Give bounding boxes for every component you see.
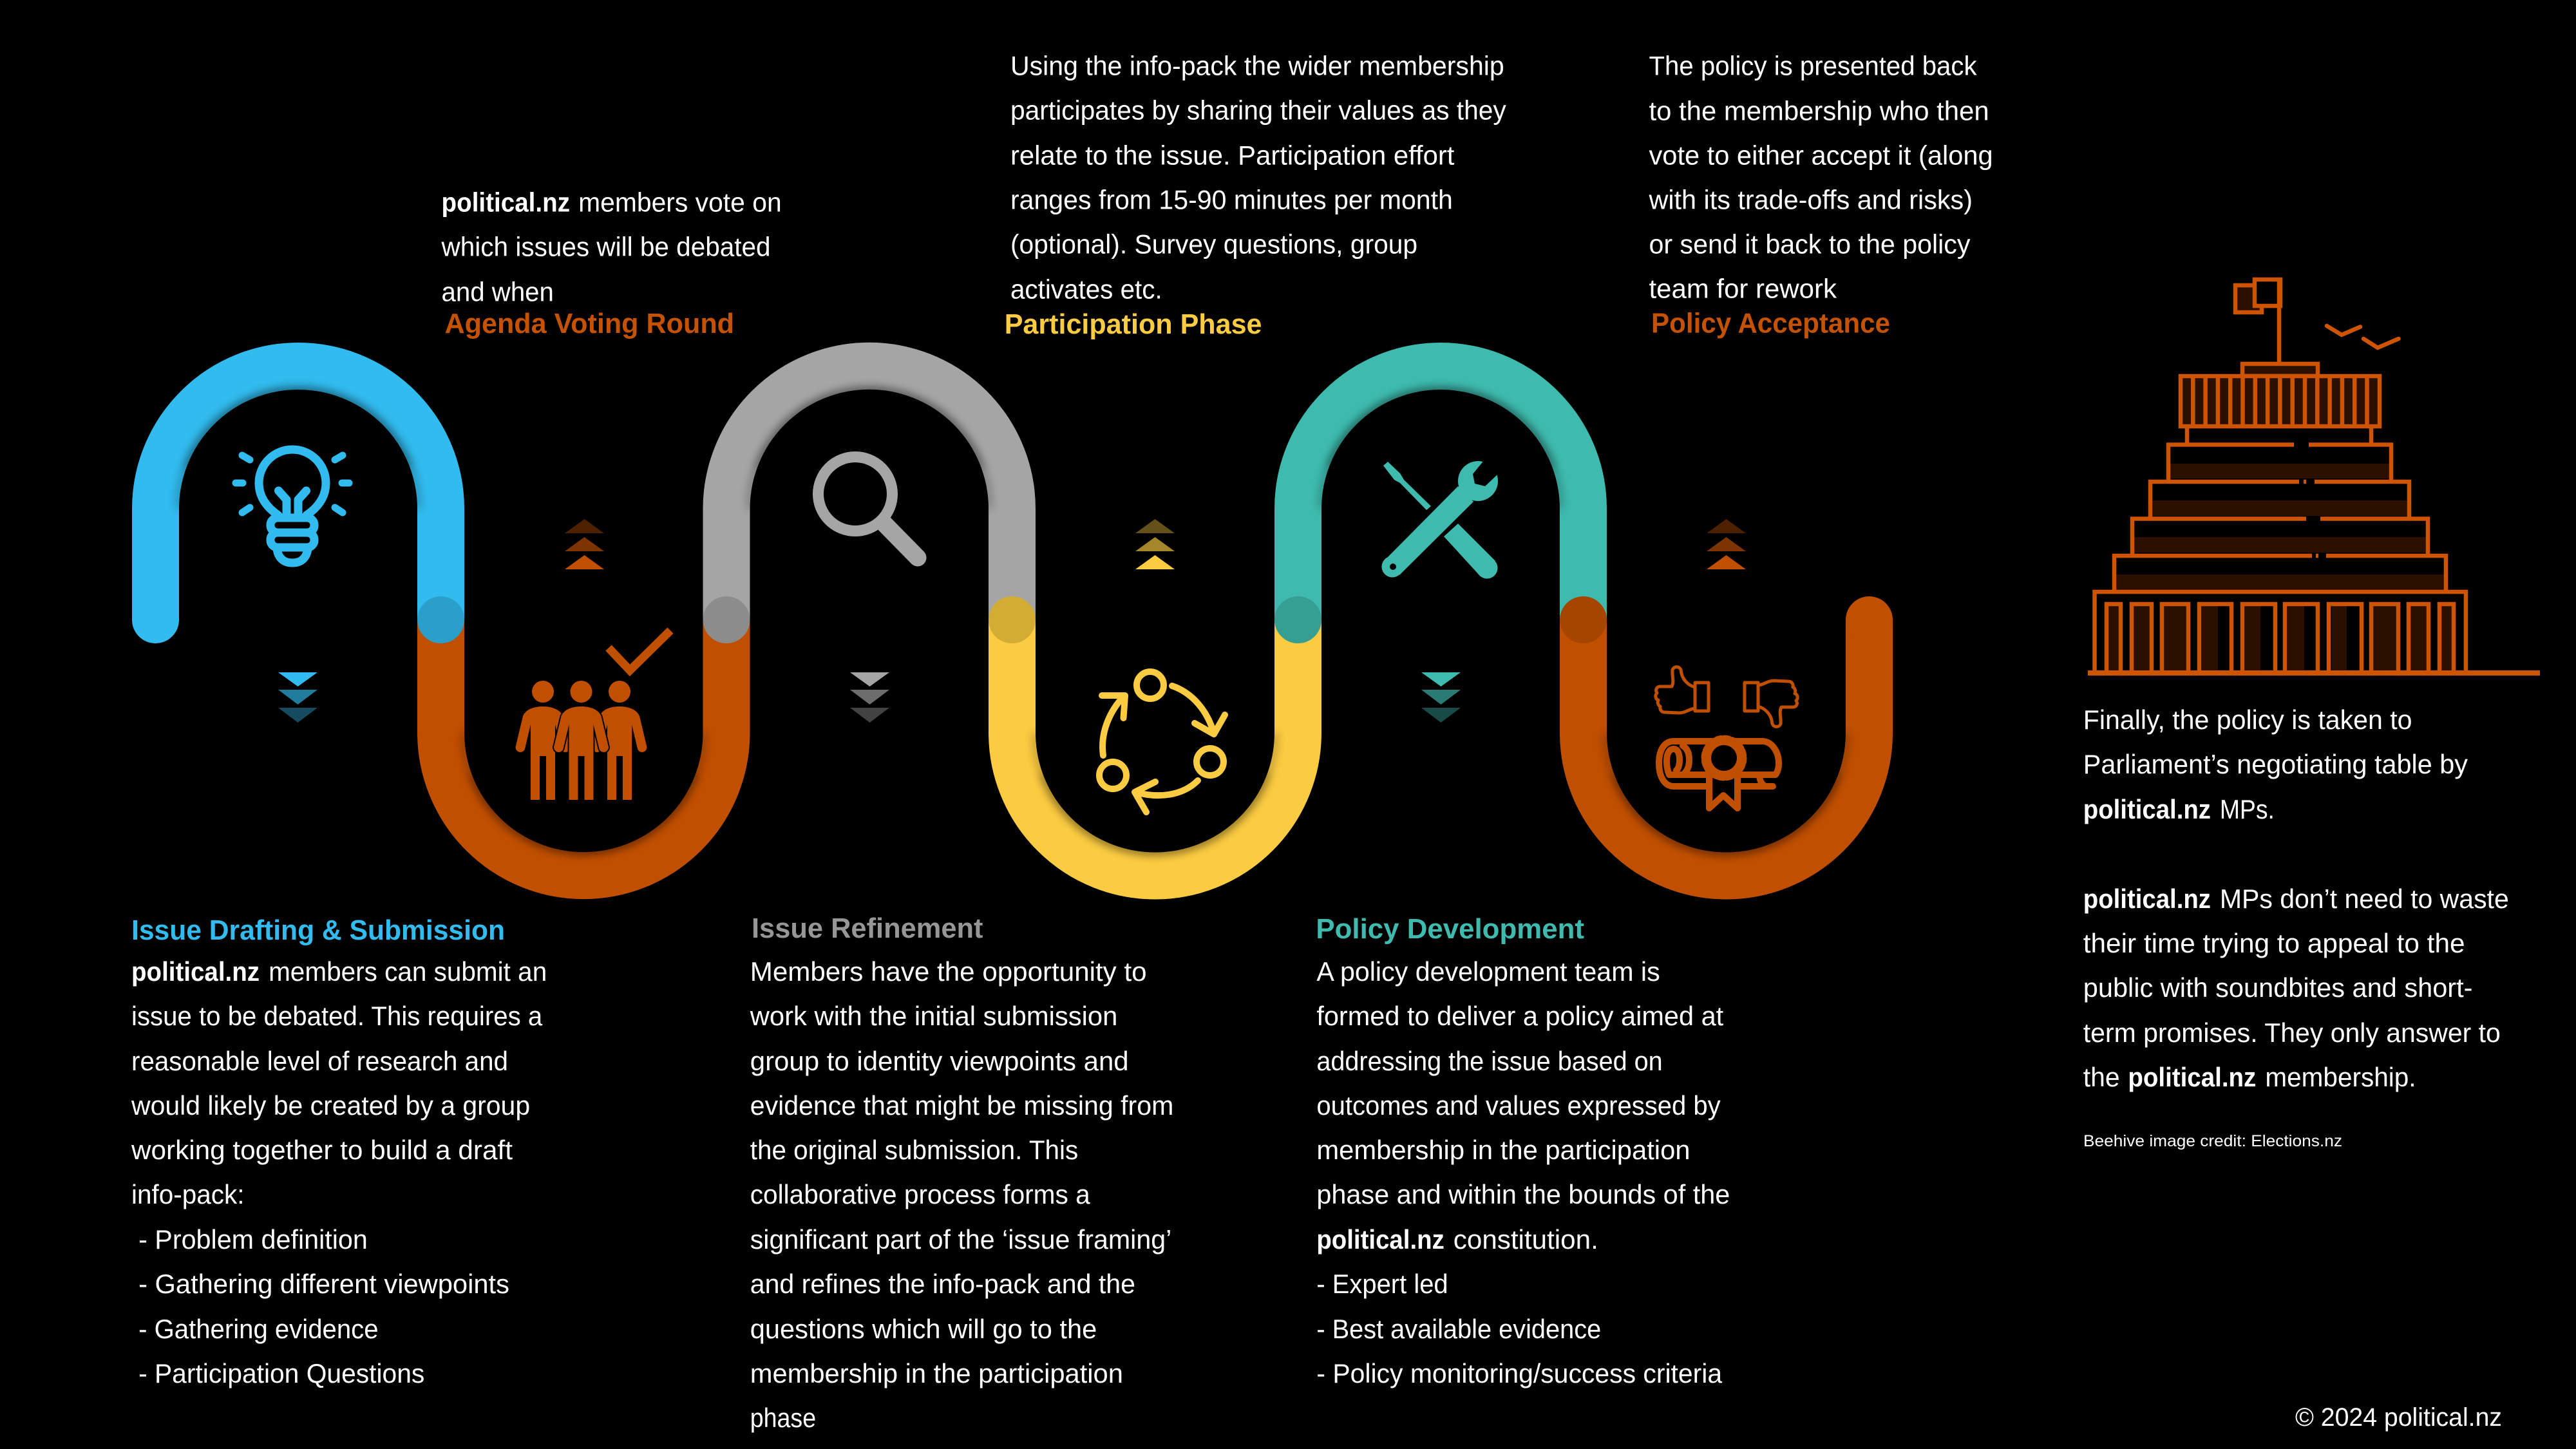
text: participation phase: activates etc. <box>1010 274 1162 304</box>
serpentine ribbon <box>132 366 1893 876</box>
text: participation phase: (optional). Survey questions, group <box>1010 229 1417 259</box>
band: policy acceptance <box>1583 596 1893 876</box>
text: issue drafting and submission: political.nz <box>131 956 260 987</box>
text: issue drafting and submission: info-pack: <box>131 1179 245 1209</box>
band: issue refinement <box>726 366 1012 620</box>
text: policy development: phase and within the bounds of the <box>1316 1179 1730 1209</box>
text: issue refinement: group to identity viewpoints and <box>750 1046 1129 1076</box>
text: participation phase: relate to the issue. Participation effort <box>1010 140 1455 170</box>
text: policy acceptance: with its trade-offs and risks) <box>1649 185 1973 214</box>
text: parliament explanation: MPs. <box>2220 794 2275 824</box>
text: participation phase: Using the info-pack the wider membership <box>1010 51 1504 80</box>
chevrons: participation up <box>1135 519 1175 569</box>
text: parliament explanation: term promises. They only answer to <box>2083 1018 2501 1048</box>
band: policy development <box>1298 366 1583 620</box>
text: policy acceptance: or send it back to the policy <box>1649 229 1970 259</box>
text: policy acceptance: The policy is presented back <box>1649 51 1977 80</box>
copyright: © 2024 political.nz <box>2295 1403 2502 1432</box>
text: policy development: A policy development team is <box>1316 956 1660 987</box>
text: policy development: constitution. <box>1454 1224 1598 1255</box>
chevrons: issue drafting down <box>278 672 317 723</box>
text: issue refinement: phase <box>750 1403 816 1433</box>
junction discs <box>417 596 1607 643</box>
text: issue refinement: the original submission. This <box>750 1135 1078 1165</box>
text: policy development: formed to deliver a policy aimed at <box>1316 1001 1723 1031</box>
heading: issue drafting and submission: Issue Drafting & Submission <box>131 914 505 946</box>
text: parliament explanation: political.nz <box>2083 794 2211 824</box>
text: issue refinement: and refines the info-pack and the <box>750 1269 1135 1299</box>
text: parliament explanation: membership. <box>2265 1062 2416 1092</box>
base colonnade <box>2088 592 2540 673</box>
text: issue drafting and submission <box>131 956 547 1388</box>
heading: policy development: Policy Development <box>1316 913 1584 945</box>
certificate scroll <box>1659 737 1779 808</box>
text: policy development: political.nz <box>1316 1224 1444 1255</box>
text: policy development: - Expert led <box>1316 1269 1448 1299</box>
text: policy acceptance <box>1649 51 1993 303</box>
text: parliament explanation <box>2083 705 2509 1092</box>
thumbs up <box>1656 667 1709 713</box>
text: parliament explanation: political.nz <box>2128 1062 2256 1092</box>
text: issue drafting and submission: working together to build a draft <box>131 1135 513 1165</box>
text: policy development <box>1316 956 1730 1388</box>
text: parliament explanation: the <box>2083 1062 2120 1092</box>
text: issue refinement: collaborative process forms a <box>750 1179 1090 1209</box>
text: policy development: - Policy monitoring/success criteria <box>1316 1358 1723 1388</box>
inner edge shading <box>179 390 1846 853</box>
text: parliament explanation: public with soundbites and short- <box>2083 972 2472 1003</box>
dome cap and drum <box>2181 364 2380 444</box>
text: policy development: addressing the issue based on <box>1316 1046 1663 1076</box>
text: agenda voting round <box>441 187 782 307</box>
text: issue drafting and submission: members can submit an <box>269 956 547 987</box>
text: parliament explanation: Finally, the policy is taken to <box>2083 705 2412 735</box>
text: policy acceptance: team for rework <box>1649 274 1837 303</box>
chevrons: policy development down <box>1421 672 1461 723</box>
birds <box>2327 326 2398 348</box>
text: issue refinement: work with the initial submission <box>750 1001 1117 1031</box>
flag <box>2235 279 2280 364</box>
text: parliament explanation: Parliament’s negotiating table by <box>2083 749 2468 779</box>
text: issue refinement: membership in the participation <box>750 1358 1123 1388</box>
text: parliament explanation: their time trying to appeal to the <box>2083 928 2465 958</box>
icon: participation cycle <box>1099 672 1225 812</box>
image credit: Beehive image credit: Elections.nz <box>2083 1132 2342 1150</box>
band: participation <box>1012 620 1298 876</box>
illustration: beehive parliament building <box>2088 279 2540 673</box>
text: policy acceptance: vote to either accept it (along <box>1649 140 1993 170</box>
text: issue refinement <box>750 956 1173 1433</box>
chevrons: refinement down <box>850 672 889 723</box>
text: parliament explanation: MPs don’t need to waste <box>2220 884 2509 914</box>
text: policy development: - Best available evidence <box>1316 1314 1601 1344</box>
icon: wrench and screwdriver <box>1382 459 1504 578</box>
chevrons: agenda voting up <box>565 519 604 569</box>
text: issue refinement: significant part of the ‘issue framing’ <box>750 1224 1171 1255</box>
text: agenda voting round: and when <box>442 277 554 307</box>
text: issue drafting and submission: - Participation Questions <box>138 1358 424 1388</box>
heading: participation phase: Participation Phase <box>1005 308 1262 340</box>
text: parliament explanation: political.nz <box>2083 884 2211 914</box>
text: policy acceptance: to the membership who then <box>1649 96 1989 126</box>
text: issue drafting and submission: reasonable level of research and <box>131 1046 508 1076</box>
text: issue drafting and submission: - Gathering evidence <box>138 1314 379 1344</box>
text: issue refinement: Members have the opportunity to <box>750 956 1147 987</box>
chevrons: policy acceptance up <box>1707 519 1746 569</box>
icon: light bulb <box>236 450 349 563</box>
text: issue refinement: evidence that might be missing from <box>750 1090 1173 1121</box>
icon: three voters with check mark <box>516 630 670 800</box>
text: issue drafting and submission: - Gathering different viewpoints <box>138 1269 509 1299</box>
heading: policy acceptance: Policy Acceptance <box>1651 308 1890 339</box>
text: issue drafting and submission: would likely be created by a group <box>131 1090 530 1121</box>
text: policy development: membership in the participation <box>1316 1135 1690 1165</box>
text: participation phase <box>1010 51 1506 304</box>
heading: issue refinement: Issue Refinement <box>752 913 983 944</box>
text: agenda voting round: members vote on <box>578 187 782 217</box>
text: issue refinement: questions which will go to the <box>750 1314 1097 1344</box>
text: policy development: outcomes and values expressed by <box>1316 1090 1721 1121</box>
icon: thumbs up, thumbs down and certificate <box>1656 667 1797 808</box>
tiers <box>2114 444 2446 592</box>
text: agenda voting round: which issues will be debated <box>441 232 771 261</box>
thumbs down <box>1745 681 1797 726</box>
icon: magnifying glass <box>818 457 918 558</box>
band: agenda voting <box>440 620 726 876</box>
text: agenda voting round: political.nz <box>442 187 570 217</box>
text: participation phase: participates by sharing their values as they <box>1010 95 1506 125</box>
text: issue drafting and submission: issue to be debated. This requires a <box>131 1001 543 1031</box>
heading: agenda voting round: Agenda Voting Round <box>444 308 734 339</box>
text: issue drafting and submission: - Problem definition <box>138 1224 368 1255</box>
text: participation phase: ranges from 15-90 minutes per month <box>1010 185 1453 214</box>
band: issue drafting <box>132 366 440 643</box>
